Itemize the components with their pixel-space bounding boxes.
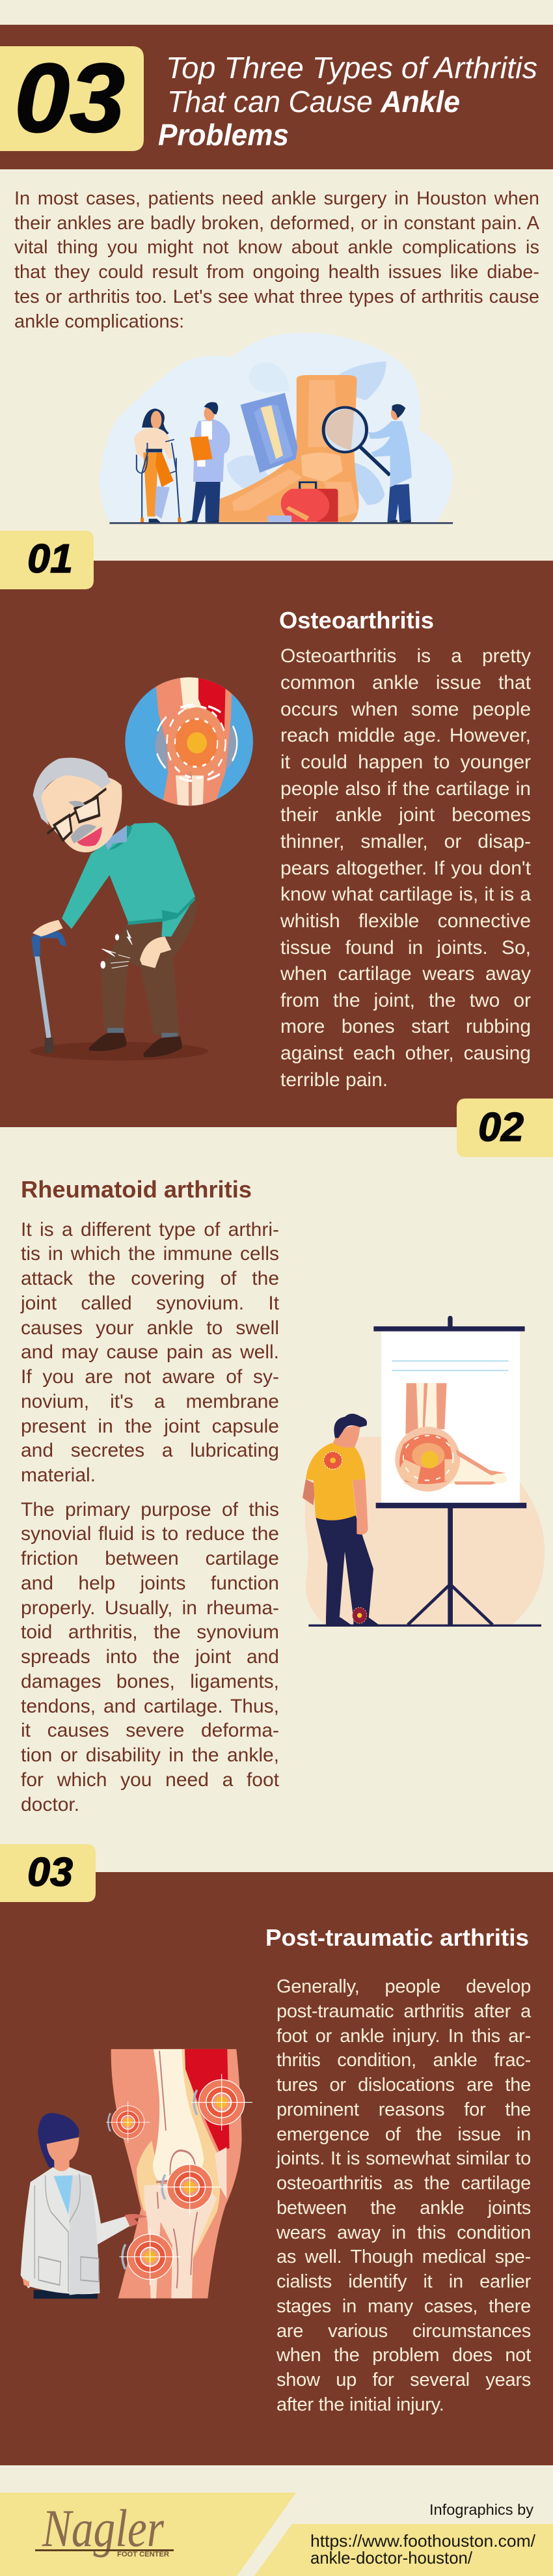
text block: post-traumatic arthritis: Generally, people develop bbox=[276, 1976, 531, 1997]
text block: rheumatoid paragraph 2: and help joints function bbox=[21, 1573, 279, 1594]
text block: post-traumatic arthritis: between the ankle joints bbox=[276, 2198, 531, 2219]
text block: post-traumatic arthritis: after the initial injury. bbox=[276, 2394, 444, 2415]
text block: post-traumatic arthritis: wears away in this condition bbox=[276, 2222, 531, 2243]
doctor with magnifier bbox=[368, 404, 412, 523]
text block: rheumatoid paragraph 1: tis in which the immune cells bbox=[21, 1243, 279, 1265]
text block: post-traumatic arthritis: when the problem does not bbox=[276, 2345, 531, 2366]
text block: rheumatoid paragraph 2: friction between cartilage bbox=[21, 1548, 279, 1569]
text block: osteoarthritis: common ankle issue that bbox=[280, 672, 531, 693]
text block: introduction: vital thing you might not know about ankle complications is bbox=[14, 237, 539, 258]
text block: introduction: ankle complications: bbox=[14, 311, 184, 332]
logo: Nagler Foot Center: FOOT CENTER bbox=[117, 2551, 169, 2558]
heading: Post-traumatic arthritis: Post-traumatic arthritis bbox=[265, 1924, 529, 1951]
text block: osteoarthritis: pears altogether. If you don't bbox=[280, 858, 531, 879]
x-ray bbox=[240, 393, 297, 473]
badge: big number 03: 03 bbox=[14, 43, 125, 152]
text block: post-traumatic arthritis bbox=[276, 1976, 531, 2415]
text block: osteoarthritis: terrible pain. bbox=[280, 1069, 388, 1091]
badge: 02: 02 bbox=[478, 1105, 524, 1150]
text block: post-traumatic arthritis: prominent reasons for the bbox=[276, 2099, 531, 2120]
knee detail bubble bbox=[125, 676, 253, 809]
background leaves bbox=[227, 361, 386, 505]
illustration: ankle examination scene bbox=[100, 333, 453, 524]
magnifying glass bbox=[323, 408, 390, 475]
text block: rheumatoid paragraph 2: for which you need a foot bbox=[21, 1769, 279, 1791]
text block: osteoarthritis: thinner, smaller, or disap- bbox=[280, 831, 531, 852]
ground line bbox=[308, 1625, 541, 1627]
title bbox=[158, 51, 537, 152]
pain targets bbox=[106, 2074, 252, 2285]
text block: post-traumatic arthritis: joints. It is somewhat similar to bbox=[276, 2148, 531, 2169]
text block: osteoarthritis: their ankle joint becomes bbox=[280, 804, 531, 826]
illustration: man viewing ankle chart bbox=[303, 1316, 545, 1627]
trousers bbox=[101, 902, 196, 1035]
badge: 01: 01 bbox=[27, 537, 73, 581]
text block: rheumatoid paragraph 1: material. bbox=[21, 1464, 96, 1486]
text block: post-traumatic arthritis: are various circumstances bbox=[276, 2321, 531, 2342]
text block: post-traumatic arthritis: thritis condition, ankle frac- bbox=[276, 2050, 531, 2071]
text block: rheumatoid paragraph 2: properly. Usually, in rheuma- bbox=[21, 1597, 279, 1619]
footer credit label: Infographics by bbox=[429, 2501, 533, 2518]
text block: osteoarthritis: know what cartilage is, it is a bbox=[280, 884, 531, 905]
text block: osteoarthritis: Osteoarthritis is a pretty bbox=[280, 645, 531, 667]
man in yellow shirt bbox=[303, 1414, 379, 1625]
text block: post-traumatic arthritis: cialists identify it in earlier bbox=[276, 2271, 531, 2292]
text block: rheumatoid paragraph 2: toid arthritis, the synovium bbox=[21, 1621, 279, 1643]
text block: post-traumatic arthritis: as well. Though medical spe- bbox=[276, 2247, 531, 2267]
pain sparks bbox=[101, 930, 132, 968]
cane bbox=[31, 931, 66, 1053]
footer url panel: https://www.foothouston.com/ bbox=[310, 2531, 536, 2551]
text block: rheumatoid paragraph 1: attack the covering of the bbox=[21, 1268, 279, 1289]
text block: rheumatoid paragraph 1: and may cause pain as well. bbox=[21, 1341, 279, 1363]
text block: rheumatoid paragraph 1: joint called synovium. It bbox=[21, 1293, 279, 1314]
text block: post-traumatic arthritis: stages in many cases, there bbox=[276, 2296, 531, 2317]
foot bbox=[206, 375, 359, 522]
text block: rheumatoid paragraph 2: damages bones, ligaments, bbox=[21, 1671, 279, 1692]
text block: post-traumatic arthritis: osteoarthritis as the cartilage bbox=[276, 2173, 531, 2194]
badge: 01 bbox=[0, 531, 94, 589]
floor shadow bbox=[31, 1042, 208, 1061]
doctor with clipboard bbox=[183, 402, 230, 523]
text block: introduction bbox=[14, 188, 539, 332]
text block: rheumatoid paragraph 2: it causes severe deforma- bbox=[21, 1720, 279, 1741]
text block: osteoarthritis: tissue found in joints. So, bbox=[280, 937, 531, 959]
text block: osteoarthritis: when cartilage wears away bbox=[280, 963, 531, 985]
text block: introduction: their ankles are badly broken, deformed, or in constant pain. A bbox=[14, 213, 539, 234]
illustration: old man with knee pain bbox=[31, 676, 253, 1061]
background blob bbox=[100, 333, 453, 522]
ground line bbox=[109, 522, 453, 524]
socks and shoes bbox=[89, 1028, 182, 1057]
panel: osteoarthritis background bbox=[0, 561, 553, 1127]
hands bbox=[33, 920, 171, 968]
text block: rheumatoid paragraph 1: If you are not aware of sy- bbox=[21, 1366, 279, 1388]
heading: Osteoarthritis: Osteoarthritis bbox=[279, 607, 434, 634]
text block: osteoarthritis: it could happen to younger bbox=[280, 751, 531, 773]
text block: rheumatoid paragraph 2: tion or disability in the ankle, bbox=[21, 1744, 279, 1766]
text block: rheumatoid paragraph 1: and secretes a lubricating bbox=[21, 1440, 279, 1461]
patient with crutches bbox=[134, 408, 181, 523]
logo: Nagler Foot Center: Nagler bbox=[42, 2499, 165, 2558]
text block: rheumatoid paragraph 2: doctor. bbox=[21, 1794, 79, 1815]
text block: rheumatoid paragraph 1 bbox=[20, 1219, 279, 1486]
panel: post-traumatic arthritis background bbox=[0, 1872, 553, 2465]
footer url panel: ankle-doctor-houston/ bbox=[310, 2548, 473, 2568]
text block: rheumatoid paragraph 1: novium, it's a membrane bbox=[21, 1391, 279, 1412]
text block: post-traumatic arthritis: show up for several years bbox=[276, 2370, 531, 2390]
peach blob bbox=[305, 1436, 545, 1625]
head bbox=[33, 758, 122, 852]
text block: post-traumatic arthritis: post-traumatic arthritis after a bbox=[276, 2001, 531, 2022]
text block: rheumatoid paragraph 1: present in the joint capsule bbox=[21, 1416, 279, 1437]
text block: rheumatoid paragraph 2: tendons, and cartilage. Thus, bbox=[21, 1696, 279, 1717]
text block: osteoarthritis: reach middle age. However, bbox=[280, 725, 531, 746]
text block: post-traumatic arthritis: tures or dislocations are the bbox=[276, 2075, 531, 2095]
footer url panel bbox=[254, 2524, 553, 2576]
badge: 03: 03 bbox=[27, 1850, 73, 1895]
first aid bag bbox=[267, 483, 338, 522]
heading: Rheumatoid arthritis: Rheumatoid arthritis bbox=[21, 1176, 252, 1203]
panel: title banner bbox=[0, 25, 553, 169]
ankle chart bbox=[395, 1383, 507, 1492]
title: That can Cause Ankle bbox=[167, 85, 460, 119]
text block: post-traumatic arthritis: foot or ankle injury. In this ar- bbox=[276, 2026, 531, 2047]
text block: osteoarthritis: occurs when some people bbox=[280, 699, 531, 720]
badge: 03 bbox=[0, 1844, 96, 1902]
text block: rheumatoid paragraph 2: The primary purpose of this bbox=[21, 1499, 279, 1520]
text block: osteoarthritis: from the joint, the two or bbox=[280, 990, 531, 1011]
text block: rheumatoid paragraph 2: spreads into the joint and bbox=[21, 1646, 279, 1668]
title: Top Three Types of Arthritis bbox=[166, 51, 537, 85]
text block: introduction: that they could result from ongoing health issues like diabe- bbox=[14, 262, 539, 283]
text block: introduction: tes or arthritis too. Let's see what three types of arthritis cause bbox=[14, 287, 539, 307]
footer logo panel bbox=[0, 2493, 296, 2576]
text block: osteoarthritis: against each other, causing bbox=[280, 1043, 531, 1064]
text block: post-traumatic arthritis: emergence of the issue in bbox=[276, 2124, 531, 2145]
illustration: doctor with knee diagram bbox=[21, 2049, 252, 2299]
knee anatomy bbox=[111, 2049, 242, 2299]
doctor bbox=[21, 2113, 148, 2299]
text block: introduction: In most cases, patients need ankle surgery in Houston when bbox=[14, 188, 539, 209]
text block: rheumatoid paragraph 2 bbox=[21, 1499, 279, 1815]
text block: osteoarthritis: people also if the cartilage in bbox=[280, 778, 531, 800]
text block: rheumatoid paragraph 2: synovial fluid is to reduce the bbox=[21, 1523, 279, 1545]
poster stand bbox=[373, 1316, 526, 1625]
text block: osteoarthritis bbox=[280, 645, 531, 1091]
sweater bbox=[62, 822, 195, 936]
text block: rheumatoid paragraph 1: causes your ankle to swell bbox=[21, 1317, 279, 1339]
text block: rheumatoid paragraph 1: It is a different type of arthri- bbox=[21, 1219, 279, 1240]
title: Problems bbox=[158, 118, 289, 152]
text block: osteoarthritis: more bones start rubbing bbox=[280, 1016, 531, 1037]
text block: osteoarthritis: whitish flexible connective bbox=[280, 910, 531, 932]
badge: 02 bbox=[457, 1099, 553, 1157]
